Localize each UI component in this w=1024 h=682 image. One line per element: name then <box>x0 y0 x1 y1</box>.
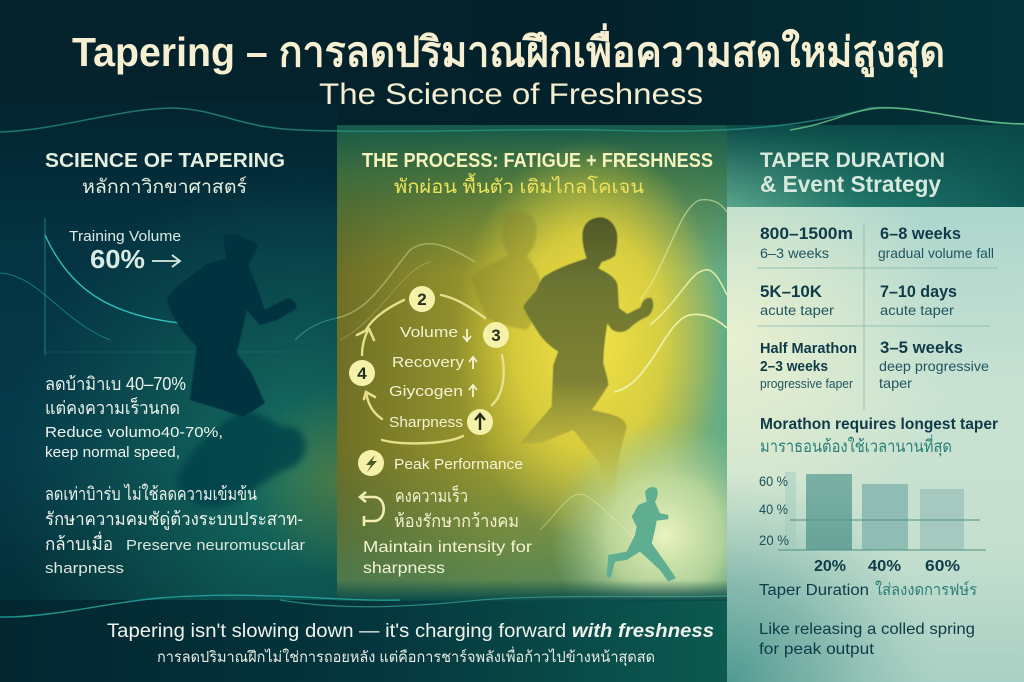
table: event taper durations: 6–3 weeks <box>760 245 829 261</box>
text block: reduce volume: Reduce volumo40-70%, <box>45 424 223 441</box>
panel: science of tapering <box>0 150 338 577</box>
bar chart: 20 % <box>759 532 789 548</box>
heading: taper duration <box>760 149 945 197</box>
icon: runner silhouette <box>167 235 306 507</box>
bar chart: 60 % <box>759 473 788 489</box>
table: event taper durations: 800–1500m <box>760 224 853 243</box>
text block: reduce volume: ลดบ้ามิาเบ 40–70% <box>45 374 186 394</box>
text block: maintain intensity: ห้องรักษากว้างคม <box>394 511 519 531</box>
heading: science of tapering: หลักกาวิกขาศาสตร์ <box>82 176 247 198</box>
panel: duration background <box>727 125 1024 682</box>
text block: reduce volume: keep normal speed, <box>45 444 180 461</box>
table: event taper durations: 7–10 days <box>880 282 957 301</box>
cycle node 4: 4 <box>357 364 367 383</box>
text block: preserve sharpness: กล้าบเมื่อ <box>45 531 113 554</box>
cycle node 3 <box>483 322 509 348</box>
panel: the process <box>337 150 727 582</box>
table: event taper durations <box>760 224 994 391</box>
spring note <box>759 621 975 658</box>
text block: preserve sharpness <box>45 483 305 577</box>
table: event taper durations: acute taper <box>880 302 954 318</box>
icon: lightning bolt <box>358 450 384 476</box>
table: event taper durations: 5K–10K <box>760 282 823 301</box>
title <box>72 23 945 111</box>
energy waves <box>337 200 727 560</box>
cycle labels <box>389 324 477 431</box>
subtitle: The Science of Freshness <box>319 78 703 111</box>
text: marathon note: มาราธอนต้องใช้เวลานานที่สุด <box>760 434 952 457</box>
chart caption: Taper Duration <box>759 582 869 599</box>
table: event taper durations: gradual volume fall <box>878 245 994 261</box>
closing statement: Tapering isn't slowing down — it's charging forward with freshness <box>107 621 714 642</box>
chart caption: ใส่ลงงดการฟษ์ร <box>875 580 977 599</box>
bar chart <box>759 472 986 575</box>
table: event taper durations: 2–3 weeks <box>760 358 828 375</box>
bar chart: 20% <box>814 558 846 575</box>
table: event taper durations: progressive faper <box>760 376 854 391</box>
text: marathon note <box>760 416 998 457</box>
cycle labels: Giycogen <box>389 383 463 400</box>
icon: small runner <box>607 487 676 582</box>
table: event taper durations: 6–8 weeks <box>880 224 961 243</box>
cycle node 2: 2 <box>417 290 427 309</box>
table: event taper durations: Half Marathon <box>760 340 857 357</box>
training volume label: Training Volume <box>69 228 181 245</box>
icon: return arrow <box>360 492 384 526</box>
closing statement thai: การลดปริมาณฝึกไม่ใช่การถอยหลัง แต่คือการชาร์จพลังเพื่อก้าวไปข้างหน้าสุดสด <box>157 646 655 667</box>
bar chart: 60% <box>925 558 960 575</box>
bar chart: 40% <box>868 558 901 575</box>
text block: preserve sharpness: ลดเท่าบิาร่บ ไม่ใช้ลดความเข้มข้น <box>45 483 257 504</box>
text block: maintain intensity: Maintain intensity for <box>363 539 533 556</box>
chart caption <box>759 580 977 599</box>
title: Tapering – การลดปริมาณฝึกเพื่อความสดใหม่สูงสุด <box>72 23 945 78</box>
header waves <box>0 107 1024 132</box>
text block: preserve sharpness: รักษาความคมชัดู่ต้วงระบบประสาท- <box>45 509 303 530</box>
heading: taper duration: TAPER DURATION <box>760 149 945 172</box>
bar chart: 40 % <box>759 501 788 517</box>
panel: taper duration <box>757 149 998 658</box>
panel: process background <box>337 125 727 601</box>
cycle diagram <box>349 286 509 443</box>
text block: maintain intensity: sharpness <box>363 560 445 577</box>
text block: reduce volume: แต่คงความเร็วนกด <box>45 396 180 418</box>
table: event taper durations: taper <box>879 375 912 391</box>
cycle node 3: 3 <box>491 326 501 345</box>
text block: preserve sharpness: Preserve neuromuscular <box>126 537 305 554</box>
heading: the process: THE PROCESS: FATIGUE + FRESHNESS <box>362 150 713 172</box>
cycle labels: Sharpness <box>389 414 463 431</box>
stat: 60 percent: 60% <box>90 244 145 274</box>
icon: ghost runner <box>472 209 540 330</box>
table: event taper durations: deep progressive <box>879 358 989 374</box>
cycle node 4 <box>349 360 375 386</box>
heading: the process <box>362 150 713 198</box>
spring note: Like releasing a colled spring <box>759 621 975 638</box>
bottom wave <box>0 595 727 617</box>
cycle node arrow <box>467 409 493 435</box>
text: marathon note: Morathon requires longest taper <box>760 416 998 433</box>
heading: science of tapering <box>45 150 285 198</box>
peak performance label: Peak Performance <box>394 456 523 473</box>
cycle labels: Recovery <box>392 354 465 371</box>
spring note: for peak output <box>759 641 875 658</box>
table: event taper durations: 3–5 weeks <box>880 338 963 357</box>
text block: reduce volume <box>45 374 223 461</box>
closing statement <box>107 621 714 667</box>
cycle labels: Volume <box>400 324 458 341</box>
icon: main runner <box>520 217 653 500</box>
text block: preserve sharpness: sharpness <box>45 560 124 577</box>
text block: maintain intensity: คงความเร็ว <box>395 484 468 506</box>
table: event taper durations: acute taper <box>760 302 834 318</box>
arrow: right <box>152 255 180 267</box>
text block: maintain intensity <box>363 484 533 577</box>
chart: volume curve <box>0 218 338 355</box>
heading: taper duration: & Event Strategy <box>760 171 941 197</box>
cycle node 2 <box>409 286 435 312</box>
heading: the process: พักผ่อน พื้นตัว เติมไกลโคเจน <box>394 173 644 198</box>
heading: science of tapering: SCIENCE OF TAPERING <box>45 150 285 172</box>
